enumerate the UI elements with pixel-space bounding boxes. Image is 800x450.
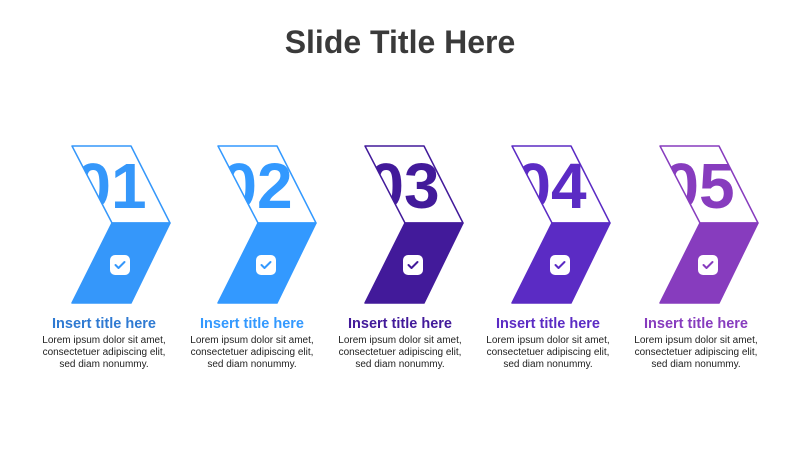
caption 5: consectetuer adipiscing elit, [635, 347, 757, 358]
caption 5 [634, 316, 758, 370]
step 2 chevron: 02 [221, 150, 293, 222]
step 4 chevron [512, 146, 610, 303]
caption 5: sed diam nonummy. [651, 359, 741, 370]
caption 3: Lorem ipsum dolor sit amet, [338, 335, 462, 346]
step 5 chevron: 05 [663, 150, 735, 222]
caption 2: consectetuer adipiscing elit, [191, 347, 313, 358]
caption 4 [486, 316, 610, 370]
caption 2: sed diam nonummy. [207, 359, 297, 370]
caption 4: sed diam nonummy. [503, 359, 593, 370]
caption 3 [338, 316, 462, 370]
caption 1: consectetuer adipiscing elit, [43, 347, 165, 358]
caption 5: Lorem ipsum dolor sit amet, [634, 335, 758, 346]
caption 2: Insert title here [200, 316, 304, 332]
caption 4: consectetuer adipiscing elit, [487, 347, 609, 358]
caption 2 [190, 316, 314, 370]
step 5 chevron [660, 146, 758, 303]
caption 1: Insert title here [52, 316, 156, 332]
step 4 chevron: 04 [515, 150, 587, 222]
caption 1: sed diam nonummy. [59, 359, 149, 370]
caption 3: consectetuer adipiscing elit, [339, 347, 461, 358]
caption 5: Insert title here [644, 316, 748, 332]
step 3 chevron: 03 [368, 150, 440, 222]
caption 4: Lorem ipsum dolor sit amet, [486, 335, 610, 346]
caption 2: Lorem ipsum dolor sit amet, [190, 335, 314, 346]
caption 3: sed diam nonummy. [355, 359, 445, 370]
caption 4: Insert title here [496, 316, 600, 332]
step 2 chevron [218, 146, 316, 303]
caption 3: Insert title here [348, 316, 452, 332]
step 1 chevron [72, 146, 170, 303]
title: Slide Title Here [285, 24, 515, 60]
step 3 chevron [365, 146, 463, 303]
caption 1: Lorem ipsum dolor sit amet, [42, 335, 166, 346]
caption 1 [42, 316, 166, 370]
step 1 chevron: 01 [75, 150, 147, 222]
